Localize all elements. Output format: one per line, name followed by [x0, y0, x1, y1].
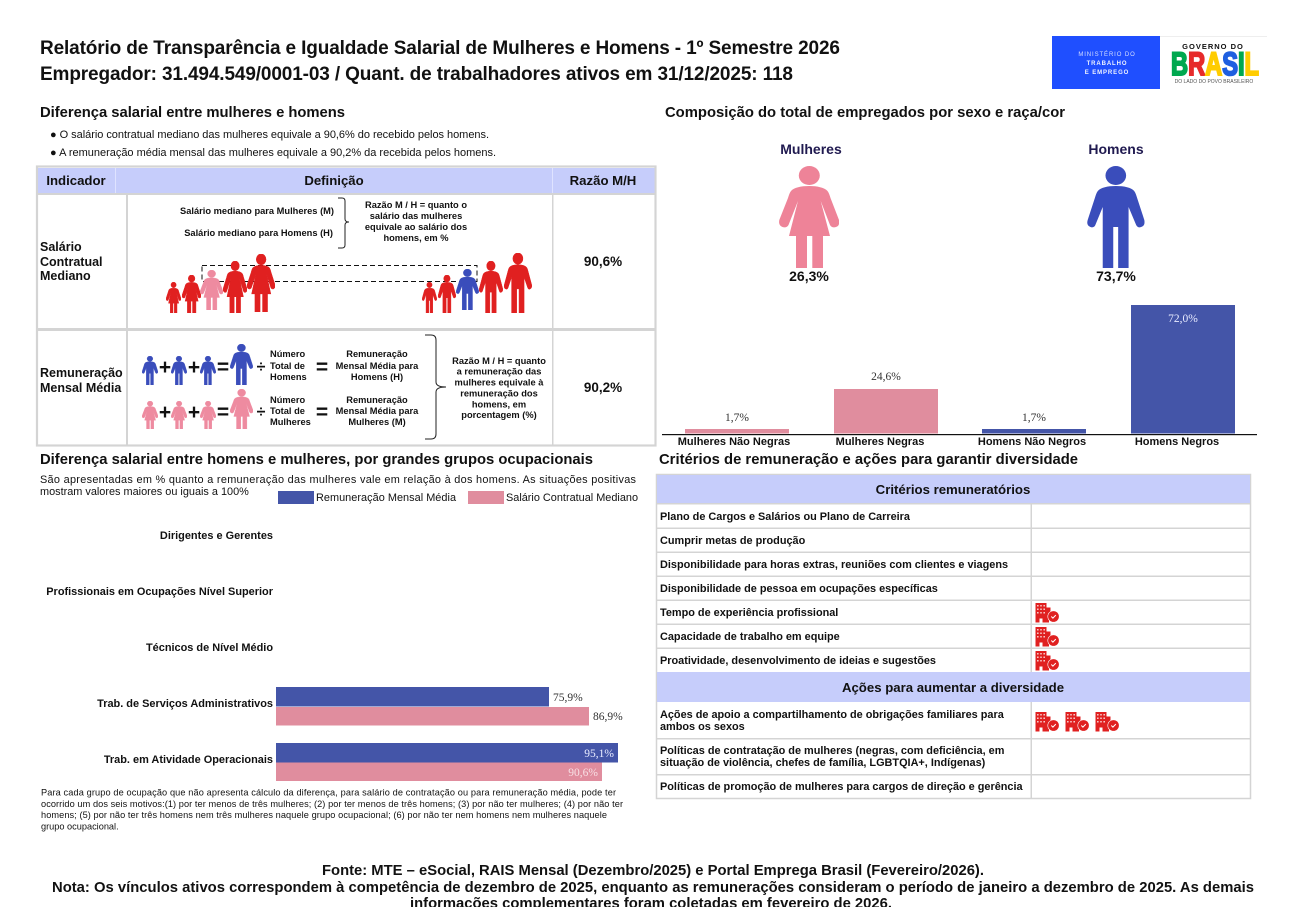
criteria list: Disponibilidade para horas extras, reuniões com clientes e viagens — [660, 559, 1008, 571]
brace: remuneração — [425, 335, 446, 439]
row label: salário contratual mediano — [40, 240, 102, 283]
title — [40, 38, 840, 85]
bar chart: grupos ocupacionais: Trab. em Atividade Operacionais — [104, 754, 273, 766]
summary bullets: ● O salário contratual mediano das mulheres equivale a 90,6% do recebido pelos homens. — [50, 129, 489, 141]
salário definition text: Salário mediano para Homens (H) — [184, 228, 333, 238]
bar chart: raça/cor: 1,7% — [1022, 412, 1046, 424]
pictogram: homens 73,7%: 73,7% — [1096, 268, 1136, 284]
value: 90,2%: 90,2% — [584, 380, 622, 395]
bar chart: raça/cor: 72,0% — [1168, 313, 1198, 325]
remuneração definition text: mulheres equivale à — [455, 378, 544, 388]
equation: mulheres: + — [159, 401, 171, 424]
header: ações: Ações para aumentar a diversidade — [842, 680, 1064, 695]
salário definition text: salário das mulheres — [370, 211, 462, 221]
criteria list — [660, 511, 1008, 667]
source note: Fonte: MTE – eSocial, RAIS Mensal (Dezembro/2025) e Portal Emprega Brasil (Fevereiro/2026). — [322, 863, 984, 879]
equation: mulheres: Mensal Média para — [336, 406, 419, 416]
bar chart: grupos ocupacionais: Técnicos de Nível Médio — [146, 642, 273, 654]
icons: critérios marcados — [1036, 603, 1060, 670]
salário definition text: Razão M / H = quanto o — [365, 200, 467, 210]
bar chart: raça/cor: Mulheres Negras — [836, 436, 924, 448]
equation: mulheres: Total de — [270, 406, 305, 416]
pictogram: homens 73,7% — [1087, 141, 1145, 284]
bar chart: raça/cor: 24,6% — [871, 371, 901, 383]
logo: Governo do Brasil — [1160, 36, 1267, 85]
actions list: ambos os sexos — [660, 721, 745, 733]
equation: homens: Homens (H) — [351, 372, 403, 382]
bar chart: raça/cor: Homens Não Negros — [978, 436, 1086, 448]
equation: homens: Remuneração — [346, 349, 408, 359]
bar chart: grupos ocupacionais: 86,9% — [593, 711, 623, 723]
equation: homens: + — [159, 356, 171, 379]
equation: mulheres — [142, 389, 419, 429]
heading: critérios: Critérios de remuneração e ações para garantir diversidade — [659, 452, 1078, 468]
row label: remuneração mensal média — [40, 366, 123, 395]
criteria list: Plano de Cargos e Salários ou Plano de Carreira — [660, 511, 911, 523]
salário definition text — [180, 200, 467, 243]
brace: salário — [338, 198, 349, 248]
row label: salário contratual mediano: Contratual — [40, 255, 102, 269]
equation: homens — [142, 344, 419, 385]
value: 90,6%: 90,6% — [584, 254, 622, 269]
equation: mulheres: + — [188, 401, 200, 424]
table header: Indicador — [46, 173, 106, 188]
icons: ações marcadas — [1036, 712, 1120, 732]
actions list: Políticas de promoção de mulheres para cargos de direção e gerência — [660, 781, 1023, 793]
row label: remuneração mensal média: Remuneração — [40, 366, 123, 380]
panel: critérios remuneratórios — [656, 474, 1250, 798]
row label: salário contratual mediano: Salário — [40, 240, 82, 254]
dashed comparison box — [202, 266, 477, 282]
footnote: ocorrido um dos seis motivos:(1) por ter menos de três mulheres; (2) por ter menos de três homens; (3) por não ter mulheres; (4) por não ter — [41, 799, 623, 809]
logo: Governo do Brasil: GOVERNO DO — [1182, 42, 1244, 51]
bar chart: grupos ocupacionais — [46, 530, 623, 781]
logo: Ministério do Trabalho e Emprego — [1052, 36, 1160, 89]
bar chart: grupos ocupacionais: 75,9% — [553, 692, 583, 704]
logo: Ministério do Trabalho e Emprego: MINISTÉRIO DO — [1078, 51, 1136, 58]
criteria list: Proatividade, desenvolvimento de ideias e sugestões — [660, 655, 936, 667]
chart description: mostram valores maiores ou iguais a 100% — [40, 486, 249, 498]
remuneração definition text: homens, em — [472, 400, 526, 410]
logo: Ministério do Trabalho e Emprego: E EMPREGO — [1085, 70, 1129, 76]
equation: homens: ÷ — [257, 359, 266, 376]
summary bullets: ● A remuneração média mensal das mulheres equivale a 90,2% da recebida pelos homens. — [50, 147, 496, 159]
logo: Governo do Brasil: BRASIL — [1171, 46, 1259, 82]
heading: grupos ocupacionais: Diferença salarial entre homens e mulheres, por grandes grupos ocupacionais — [40, 452, 593, 468]
pictogram: homens 73,7%: Homens — [1088, 141, 1144, 157]
footnote: grupo ocupacional. — [41, 822, 119, 832]
legend — [278, 491, 638, 504]
actions list: Políticas de contratação de mulheres (negras, com deficiência, em — [660, 745, 1005, 757]
icons: grupo de homens — [422, 253, 532, 313]
bar chart: raça/cor: 1,7% — [725, 412, 749, 424]
equation: homens: + — [188, 356, 200, 379]
actions list — [660, 709, 1023, 793]
equation: mulheres: ÷ — [257, 404, 266, 421]
row label: salário contratual mediano: Mediano — [40, 269, 91, 283]
bar chart: grupos ocupacionais: Trab. de Serviços Administrativos — [97, 698, 273, 710]
legend: Salário Contratual Mediano — [506, 492, 638, 504]
bar chart: grupos ocupacionais: 90,6% — [568, 767, 598, 779]
footnote — [41, 788, 623, 832]
bar chart: raça/cor: Homens Negros — [1135, 436, 1219, 448]
source note: Nota: Os vínculos ativos correspondem à competência de dezembro de 2025, enquanto as remunerações consideram o período de janeiro a dezembro de 2025. As demais — [52, 880, 1254, 896]
bar chart: raça/cor: Mulheres Não Negras — [678, 436, 790, 448]
icons: grupo de mulheres — [166, 254, 275, 313]
footnote: Para cada grupo de ocupação que não apresenta cálculo da diferença, para salário de contratação ou para remuneração média, pode ter — [41, 788, 616, 798]
summary bullets — [50, 129, 496, 159]
chart description: São apresentadas em % quanto a remuneração das mulheres vale em relação à dos homens. As situações positivas — [40, 474, 637, 486]
pictogram: mulheres 26,3% — [779, 141, 842, 284]
heading: diferença salarial: Diferença salarial entre mulheres e homens — [40, 105, 345, 121]
logo: Ministério do Trabalho e Emprego: TRABALHO — [1087, 61, 1127, 67]
bar chart: grupos ocupacionais: Profissionais em Ocupações Nível Superior — [46, 586, 274, 598]
equation: mulheres: Remuneração — [346, 395, 408, 405]
bar chart: grupos ocupacionais: Dirigentes e Gerentes — [160, 530, 273, 542]
bar chart: raça/cor — [662, 305, 1257, 448]
legend: Remuneração Mensal Média — [316, 492, 457, 504]
criteria list: Tempo de experiência profissional — [660, 607, 838, 619]
row label: remuneração mensal média: Mensal Média — [40, 381, 122, 395]
equation: homens: Número — [270, 349, 305, 359]
salário definition text: Salário mediano para Mulheres (M) — [180, 206, 334, 216]
table header — [46, 173, 636, 188]
equation: mulheres: Número — [270, 395, 305, 405]
equation: homens: = — [217, 356, 229, 379]
actions list: Ações de apoio a compartilhamento de obrigações familiares para — [660, 709, 1005, 721]
table header: Definição — [304, 173, 364, 188]
remuneração definition text: a remuneração das — [457, 366, 541, 376]
equation: homens: Total de — [270, 361, 305, 371]
remuneração definition text: porcentagem (%) — [461, 410, 537, 420]
pictogram: mulheres 26,3%: 26,3% — [789, 268, 829, 284]
title: Relatório de Transparência e Igualdade Salarial de Mulheres e Homens - 1º Semestre 2026 — [40, 38, 840, 59]
salário definition text: homens, em % — [383, 233, 449, 243]
source note — [52, 863, 1254, 907]
header: critérios: Critérios remuneratórios — [876, 482, 1030, 497]
criteria list: Capacidade de trabalho em equipe — [660, 631, 840, 643]
actions list: situação de violência, chefes de família, LGBTQIA+, Indígenas) — [660, 757, 986, 769]
equation: mulheres: Mulheres — [270, 417, 311, 427]
table header: Razão M/H — [570, 173, 636, 188]
equation: homens: = — [316, 356, 328, 379]
heading: composição: Composição do total de empregados por sexo e raça/cor — [665, 105, 1065, 121]
criteria list: Disponibilidade de pessoa em ocupações específicas — [660, 583, 938, 595]
panel: tabela de indicadores — [37, 166, 656, 446]
criteria list: Cumprir metas de produção — [660, 535, 806, 547]
footnote: homens; (5) por não ter três homens nem três mulheres naquele grupo ocupacional; (6) por não ter nem homens nem mulheres naquele — [41, 810, 607, 820]
remuneração definition text: remuneração dos — [460, 388, 538, 398]
pictogram: mulheres 26,3%: Mulheres — [780, 141, 842, 157]
chart description — [40, 474, 637, 498]
remuneração definition text — [452, 356, 546, 420]
bar chart: grupos ocupacionais: 95,1% — [584, 748, 614, 760]
remuneração definition text: Razão M / H = quanto — [452, 356, 546, 366]
equation: mulheres: = — [316, 401, 328, 424]
equation: mulheres: Mulheres (M) — [348, 417, 406, 427]
equation: homens: Homens — [270, 372, 307, 382]
logo: Governo do Brasil: DO LADO DO POVO BRASILEIRO — [1175, 79, 1253, 85]
salário definition text: equivale ao salário dos — [365, 222, 467, 232]
equation: mulheres: = — [217, 401, 229, 424]
equation: homens: Mensal Média para — [336, 361, 419, 371]
title: Empregador: 31.494.549/0001-03 / Quant. de trabalhadores ativos em 31/12/2025: 118 — [40, 64, 793, 85]
